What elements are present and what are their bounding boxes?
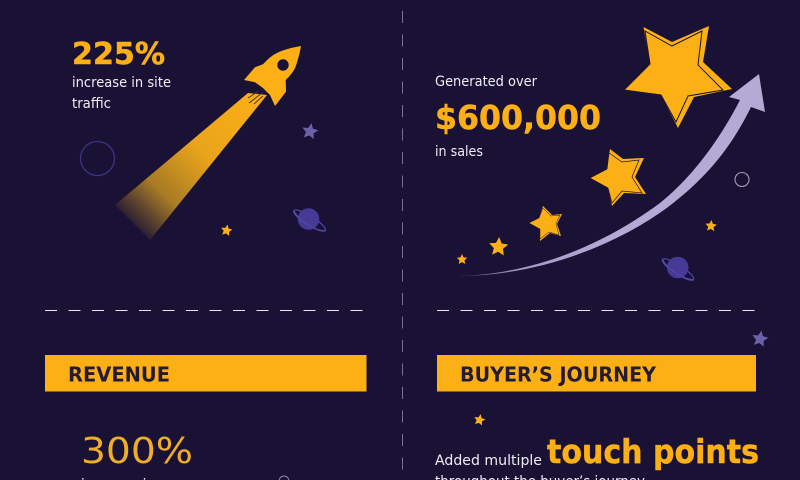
banner: buyer's journey: BUYER’S JOURNEY [460, 362, 656, 386]
stat: 225% site traffic: increase in site [72, 75, 171, 91]
banner: buyer's journey [437, 355, 756, 392]
stat: 225% site traffic: traffic [72, 96, 111, 112]
arrow: rising growth curve [458, 74, 765, 276]
stat: 300% revenue increase: 300% [81, 431, 193, 472]
stat: $600,000 in sales [435, 74, 601, 160]
icon: outline circle right [735, 172, 749, 186]
icon: tiny star left of curve [457, 254, 467, 264]
banner: revenue: REVENUE [68, 362, 170, 386]
icon: tiny star [488, 236, 509, 256]
stat: touch points: touch points [547, 432, 759, 471]
icon: outline circle left [80, 142, 114, 176]
banner: revenue [45, 355, 366, 392]
icon: outline circle bottom [279, 476, 289, 480]
icon: small star above touch points [473, 413, 486, 426]
stat: $600,000 in sales: $600,000 [435, 98, 601, 137]
icon: small star with shadow [529, 206, 562, 241]
stat: 225% site traffic [72, 37, 171, 112]
icon: small star right [705, 220, 717, 231]
stat: touch points [435, 432, 759, 480]
icon: small yellow star [220, 224, 233, 236]
stat: $600,000 in sales: in sales [435, 144, 483, 160]
stat: $600,000 in sales: Generated over [435, 74, 537, 90]
icon: ringed planet left [291, 207, 328, 234]
icon: purple star [301, 122, 319, 140]
stat: 225% site traffic: 225% [72, 37, 165, 72]
icon: large star [624, 26, 732, 128]
icon: medium star [590, 149, 646, 206]
icon: rocket with exhaust beam [115, 46, 301, 240]
icon: purple star right [751, 329, 769, 347]
icon: ringed planet right [660, 256, 696, 283]
stat: touch points: Added multiple [435, 453, 542, 469]
